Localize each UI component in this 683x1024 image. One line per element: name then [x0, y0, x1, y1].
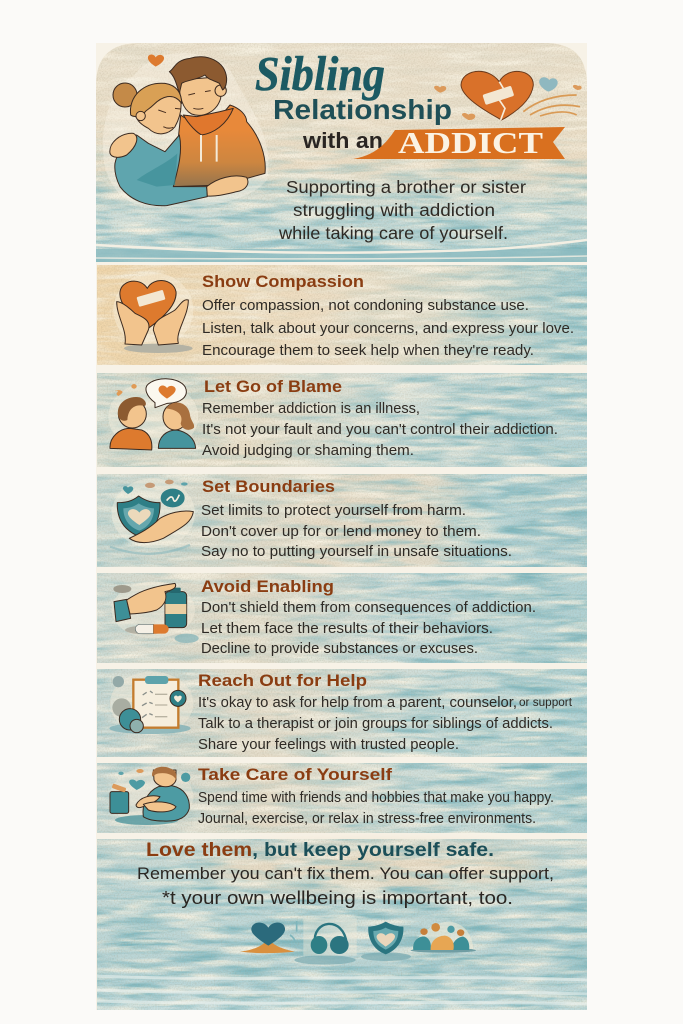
panel: reach out for help	[97, 669, 587, 757]
banner: ADDICT	[353, 125, 565, 160]
text: avoid enabling body: Let them face the results of their behaviors.	[201, 620, 493, 637]
icon: shield and open hand	[110, 478, 195, 554]
icon: shield with heart	[361, 922, 411, 961]
panel: avoid enabling	[97, 573, 587, 663]
text: reach out for help body: It's okay to ask for help from a parent, counselor,	[198, 694, 517, 711]
illustration: siblings hugging	[103, 53, 269, 207]
icon: clipboard checklist	[109, 672, 193, 735]
text: let go of blame body: It's not your fault and you can't control their addiction.	[202, 421, 558, 438]
text: let go of blame body: Avoid judging or shaming them.	[202, 442, 414, 459]
panel: set boundaries	[97, 474, 587, 567]
icon row: heart, headphones, shield, group	[240, 918, 476, 965]
text: avoid enabling body: Don't shield them from consequences of addiction.	[201, 599, 536, 616]
icon: person with arms crossed and jar	[110, 767, 193, 827]
text: avoid enabling body	[201, 599, 536, 657]
text: show compassion body: Encourage them to seek help when they're ready.	[202, 342, 534, 359]
heading: take care of yourself: Take Care of Yourself	[198, 766, 393, 784]
text: avoid enabling body: Decline to provide substances or excuses.	[201, 640, 478, 657]
text: let go of blame body: Remember addiction is an illness,	[202, 400, 420, 417]
subtitle: Supporting a brother or sister	[286, 177, 526, 197]
text: take care of yourself body: Journal, exercise, or relax in stress-free environments.	[198, 810, 536, 827]
heading: set boundaries: Set Boundaries	[202, 478, 335, 496]
card background	[96, 43, 587, 1010]
icon: headphones	[294, 918, 357, 965]
icon: group of people	[411, 922, 476, 953]
heading: show compassion: Show Compassion	[202, 273, 364, 291]
panel: header	[96, 43, 587, 262]
text: reach out for help body	[198, 694, 573, 753]
text: closing message	[137, 864, 554, 908]
title: with an: with an	[302, 128, 383, 153]
text: take care of yourself body	[198, 789, 554, 827]
panel: take care of yourself	[97, 763, 587, 833]
text: show compassion body	[202, 297, 574, 359]
subtitle: while taking care of yourself.	[278, 223, 508, 243]
text: show compassion body: Listen, talk about your concerns, and express your love.	[202, 320, 574, 337]
icon: heart with leaves	[240, 921, 297, 953]
text: show compassion body: Offer compassion, not condoning substance use.	[202, 297, 529, 314]
subtitle: struggling with addiction	[293, 200, 495, 220]
heading: avoid enabling: Avoid Enabling	[201, 578, 334, 596]
panel: show compassion	[97, 265, 587, 365]
text: reach out for help body: or support	[519, 697, 573, 709]
text: closing message: *t your own wellbeing is important, too.	[162, 888, 513, 908]
heading: reach out for help: Reach Out for Help	[198, 672, 367, 690]
text: take care of yourself body: Spend time with friends and hobbies that make you happy.	[198, 789, 554, 806]
icon: bandaged broken heart	[434, 71, 582, 120]
title: Sibling: Sibling	[255, 46, 385, 101]
icon: hand, bottle and pill	[112, 582, 199, 643]
text: closing message: Remember you can't fix them. You can offer support,	[137, 864, 554, 883]
text: set boundaries body: Say no to putting yourself in unsafe situations.	[201, 543, 512, 560]
text: reach out for help body: Talk to a therapist or join groups for siblings of addicts.	[198, 715, 553, 732]
text: set boundaries body: Set limits to protect yourself from harm.	[201, 502, 466, 519]
icon: two siblings talking	[108, 379, 198, 452]
text: set boundaries body	[201, 502, 512, 560]
panel: let go of blame	[97, 373, 587, 467]
banner: ADDICT: ADDICT	[398, 125, 543, 160]
text: set boundaries body: Don't cover up for or lend money to them.	[201, 523, 481, 540]
panel: closing message	[97, 839, 587, 1010]
subtitle	[278, 177, 526, 243]
text: let go of blame body	[202, 400, 558, 459]
text: reach out for help body: Share your feelings with trusted people.	[198, 736, 459, 753]
title: Relationship: Relationship	[273, 94, 452, 125]
heading: let go of blame: Let Go of Blame	[204, 378, 342, 396]
icon: hands holding heart	[113, 273, 193, 353]
heading: love them, but keep yourself safe: Love them , but keep yourself safe.	[146, 839, 494, 861]
